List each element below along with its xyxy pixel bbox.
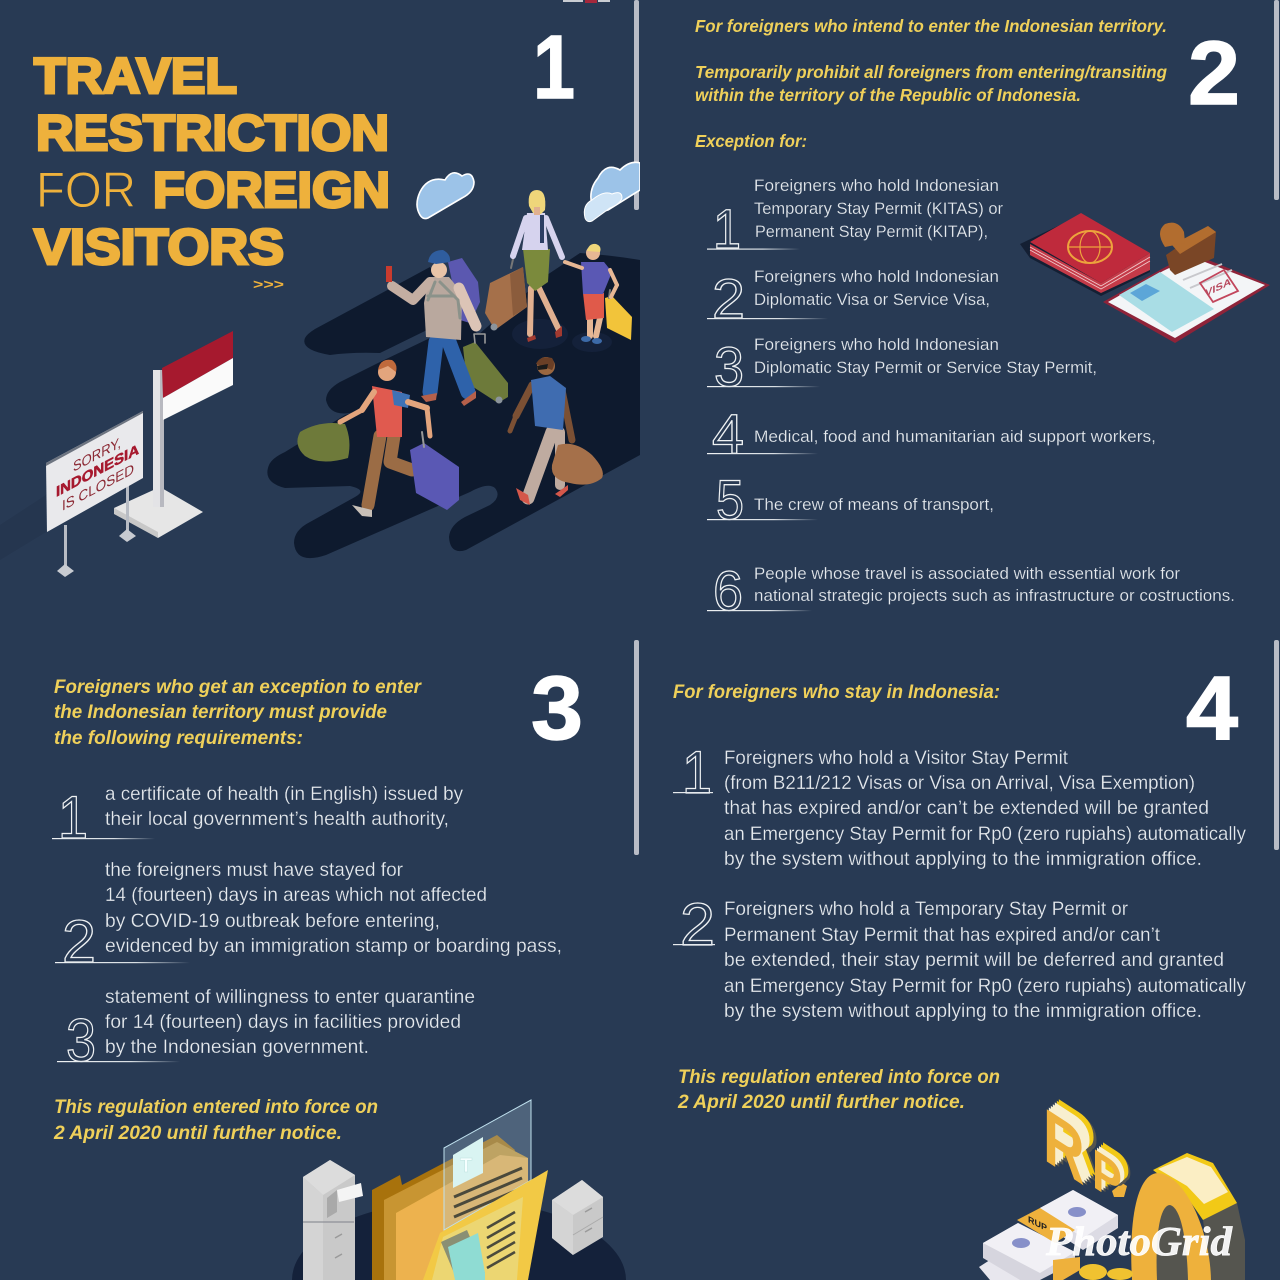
banknote bundles xyxy=(979,1190,1118,1280)
list item 3: Diplomatic Stay Permit or Service Stay Permit, xyxy=(754,358,1097,377)
list item 1 xyxy=(707,176,1003,260)
panel number 3: 3 xyxy=(531,659,583,759)
sign text: IS CLOSED xyxy=(62,461,134,515)
permit item 1: Foreigners who hold a Visitor Stay Permit xyxy=(724,747,1069,769)
intro heading: Temporarily prohibit all foreigners from entering/transiting xyxy=(695,62,1167,82)
title: RESTRICTION xyxy=(36,105,389,161)
intro heading xyxy=(695,16,1167,151)
requirement 2: 14 (fourteen) days in areas which not affected xyxy=(105,884,487,906)
icon: text card xyxy=(453,1137,483,1188)
title xyxy=(34,48,390,275)
icon: closed sign xyxy=(46,411,143,577)
folder back xyxy=(372,1135,515,1280)
arrow chevrons: >>> xyxy=(253,276,284,292)
banknote bundles: RUP xyxy=(1028,1214,1048,1234)
permit item 1: that has expired and/or can’t be extended will be granted xyxy=(724,797,1209,819)
permit item 2: be extended, their stay permit will be deferred and granted xyxy=(724,949,1224,971)
glass pane xyxy=(444,1100,531,1230)
permit item 1: 1 xyxy=(682,739,712,806)
list item 4: Medical, food and humanitarian aid support workers, xyxy=(754,427,1156,446)
list item 3: 3 xyxy=(714,335,744,398)
icon: 3D letter R: R xyxy=(1043,1091,1085,1203)
list item 4 xyxy=(707,402,1156,465)
left filing cabinet xyxy=(303,1160,363,1280)
scroll bar xyxy=(1274,640,1279,850)
permit item 1: by the system without applying to the immigration office. xyxy=(724,848,1202,870)
permit item 2: Foreigners who hold a Temporary Stay Permit or xyxy=(724,898,1128,920)
regulation note: 2 April 2020 until further notice. xyxy=(53,1123,342,1144)
coins xyxy=(1079,1264,1133,1280)
icon: text card: T xyxy=(460,1155,472,1177)
icon: zero, money and coins xyxy=(979,1153,1245,1280)
stay heading: For foreigners who stay in Indonesia: xyxy=(673,682,1000,703)
requirement 3: statement of willingness to enter quarantine xyxy=(105,986,475,1008)
list item 1: Temporary Stay Permit (KITAS) or xyxy=(754,199,1003,218)
list item 2: Foreigners who hold Indonesian xyxy=(754,267,999,286)
title: TRAVEL xyxy=(34,48,237,104)
title: FOR xyxy=(36,162,136,218)
regulation note xyxy=(677,1067,1000,1113)
permit item 2 xyxy=(673,891,1246,1022)
requirements heading: the Indonesian territory must provide xyxy=(54,702,387,723)
title: FOREIGN xyxy=(153,162,390,218)
icon: 3D letter P: P xyxy=(1092,1135,1122,1217)
big zero xyxy=(1131,1153,1245,1280)
foot shadows xyxy=(512,319,612,352)
list item 5 xyxy=(707,468,994,531)
icon: boy with yellow suitcase xyxy=(565,244,632,344)
requirement 2: evidenced by an immigration stamp or boarding pass, xyxy=(105,935,562,957)
icon: passports and visa stamp xyxy=(1020,213,1270,343)
list item 5: 5 xyxy=(716,468,744,531)
list item 3 xyxy=(707,335,1097,398)
requirements heading: Foreigners who get an exception to enter xyxy=(54,677,423,698)
regulation note: 2 April 2020 until further notice. xyxy=(677,1092,965,1113)
icon: man in red shirt with bags xyxy=(297,360,459,517)
list item 1: Permanent Stay Permit (KITAP), xyxy=(755,222,988,241)
scroll bar xyxy=(1274,0,1279,200)
title: VISITORS xyxy=(34,219,284,275)
regulation note: This regulation entered into force on xyxy=(678,1067,1000,1088)
icon: man with backpack and green suitcase xyxy=(386,250,508,406)
intro heading: For foreigners who intend to enter the Indonesian territory. xyxy=(695,16,1167,36)
list item 3: Foreigners who hold Indonesian xyxy=(754,335,999,354)
regulation note xyxy=(53,1097,378,1144)
requirement 1: a certificate of health (in English) issued by xyxy=(105,783,463,805)
panel 2: exceptions list xyxy=(695,0,1279,622)
permit item 2: Permanent Stay Permit that has expired and/or can’t xyxy=(724,924,1161,946)
permit item 1: (from B211/212 Visas or Visa on Arrival, Visa Exemption) xyxy=(724,772,1195,794)
requirements heading xyxy=(54,677,423,749)
list item 1: 1 xyxy=(713,197,741,260)
panel 1: title and travellers xyxy=(32,0,640,577)
permit item 2: 2 xyxy=(680,891,715,958)
scroll bar xyxy=(634,640,639,855)
watermark: PhotoGrid: PhotoGrid xyxy=(1045,1218,1233,1264)
intro heading: within the territory of the Republic of Indonesia. xyxy=(695,85,1081,105)
top edge remnant xyxy=(563,0,610,3)
icon: Indonesian flag xyxy=(114,331,233,538)
sign shadow xyxy=(0,495,46,560)
panel number 4: 4 xyxy=(1186,659,1238,759)
sign text: INDONESIA xyxy=(56,441,139,501)
list item 5: The crew of means of transport, xyxy=(754,495,994,514)
icon: clouds xyxy=(417,162,640,222)
list item 6: national strategic projects such as infrastructure or costructions. xyxy=(754,586,1235,605)
list item 2: 2 xyxy=(712,267,745,330)
icon: folder and filing cabinets xyxy=(292,1100,626,1280)
icon: woman with suitcase xyxy=(485,190,562,342)
requirement 3: by the Indonesian government. xyxy=(105,1036,369,1058)
requirement 1: their local government’s health authority, xyxy=(105,808,449,830)
scroll bar xyxy=(634,0,639,210)
list item 6 xyxy=(707,559,1235,622)
requirement 2: 2 xyxy=(62,908,96,975)
panel number 1: 1 xyxy=(533,18,575,118)
requirement 2: by COVID-19 outbreak before entering, xyxy=(105,910,440,932)
permit item 2: an Emergency Stay Permit for Rp0 (zero rupiahs) automatically xyxy=(724,975,1246,997)
regulation note: This regulation entered into force on xyxy=(54,1097,378,1118)
panel 4: foreigners staying xyxy=(673,640,1279,1280)
icon: man in blue shirt with brown bag xyxy=(510,357,603,505)
list item 2: Diplomatic Visa or Service Visa, xyxy=(754,290,990,309)
sign text: SORRY, xyxy=(73,435,121,476)
requirement 2 xyxy=(55,859,562,975)
requirement 2: the foreigners must have stayed for xyxy=(105,859,403,881)
list item 2 xyxy=(707,267,999,330)
panel divider xyxy=(639,640,640,1280)
requirement 1 xyxy=(52,783,463,851)
panel divider xyxy=(639,0,640,640)
requirement 3 xyxy=(57,986,475,1074)
icon: passports and visa stamp: VISA xyxy=(1205,276,1231,300)
folder front xyxy=(423,1170,548,1280)
intro heading: Exception for: xyxy=(695,131,807,151)
dark streak shadow xyxy=(267,253,640,558)
right filing cabinet xyxy=(552,1180,603,1255)
requirement 3: for 14 (fourteen) days in facilities provided xyxy=(105,1011,461,1033)
requirements heading: the following requirements: xyxy=(54,728,303,749)
permit item 1: an Emergency Stay Permit for Rp0 (zero rupiahs) automatically xyxy=(724,823,1246,845)
permit item 1 xyxy=(673,739,1246,870)
list item 6: 6 xyxy=(713,559,743,622)
list item 4: 4 xyxy=(712,402,744,465)
panel number 2: 2 xyxy=(1188,24,1240,124)
requirement 1: 1 xyxy=(58,784,88,851)
list item 6: People whose travel is associated with essential work for xyxy=(754,564,1180,583)
requirement 3: 3 xyxy=(66,1007,96,1074)
panel 3: entry requirements xyxy=(52,640,639,1280)
permit item 2: by the system without applying to the immigration office. xyxy=(724,1000,1202,1022)
list item 1: Foreigners who hold Indonesian xyxy=(754,176,999,195)
